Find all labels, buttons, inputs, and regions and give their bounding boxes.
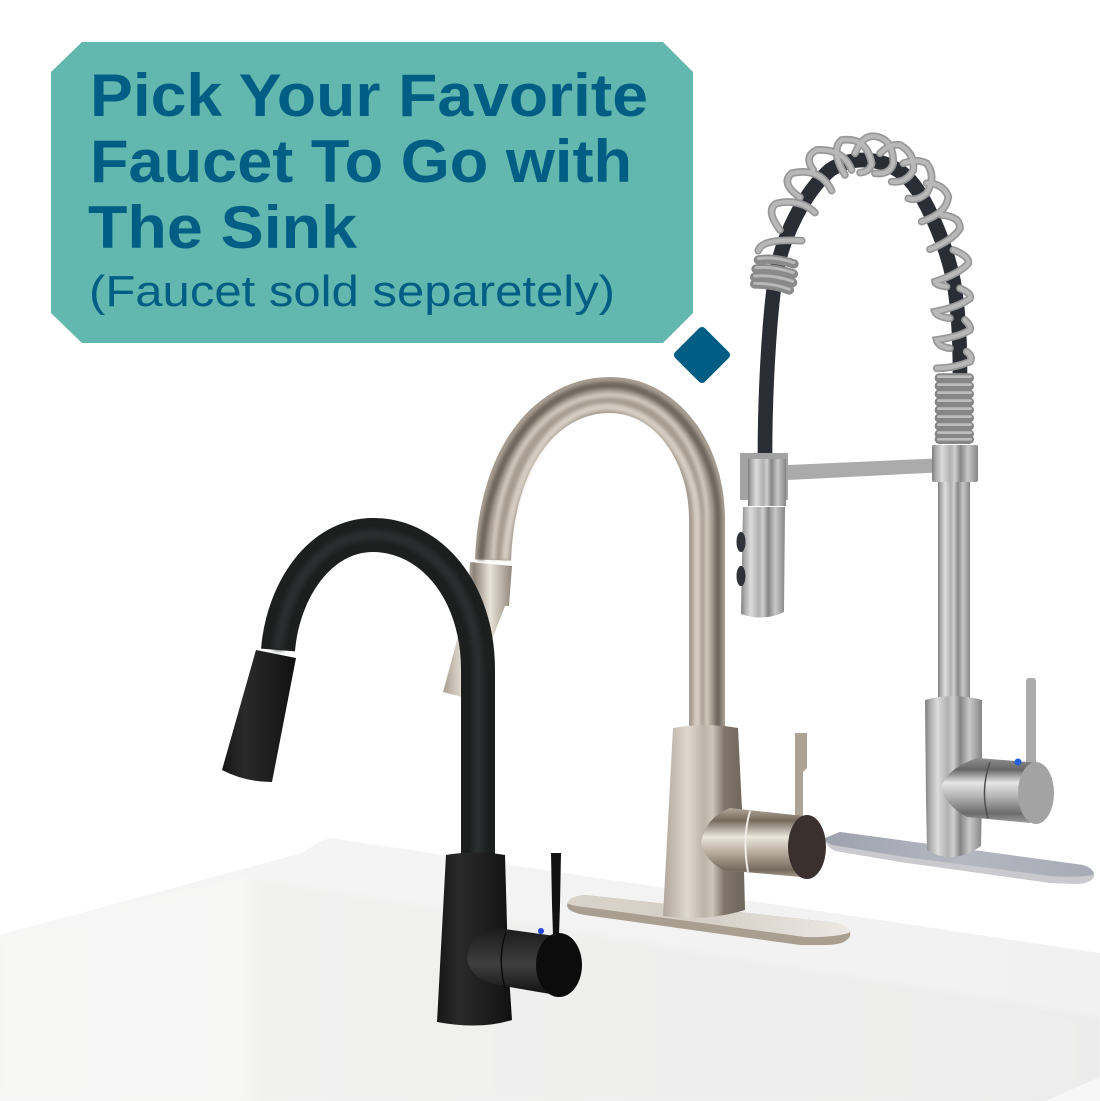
title [88, 62, 648, 261]
handle [467, 927, 582, 997]
deck plate: chrome [825, 832, 1094, 884]
base body [437, 852, 512, 1026]
title: Faucet To Go with [90, 128, 632, 195]
coil wire [758, 136, 971, 368]
icon: diamond [672, 325, 732, 385]
lever [551, 853, 561, 935]
handle [941, 758, 1054, 824]
subtitle: (Faucet sold separetely) [89, 267, 615, 316]
riser collar [932, 445, 978, 482]
base cylinder [925, 696, 982, 857]
black tube [278, 535, 478, 860]
panel: heading [51, 42, 693, 343]
faucet: matte black gooseneck [222, 535, 582, 1026]
wrapped coil at riser [939, 378, 969, 439]
sprayer clamp [740, 453, 788, 506]
gooseneck tube [481, 385, 718, 735]
spray head [222, 650, 296, 782]
faucet: chrome spring pull-down [736, 136, 1094, 884]
handle [701, 808, 826, 879]
faucet: brushed nickel gooseneck [443, 385, 850, 945]
sprayer head [736, 507, 785, 618]
base body [663, 725, 745, 918]
sink [0, 838, 1100, 1101]
spring and black hose [755, 136, 971, 453]
wrapped coil at hose end [755, 259, 794, 290]
crossbar arm [788, 458, 947, 480]
title: The Sink [88, 194, 358, 261]
black hose [765, 160, 960, 453]
riser pipe [938, 482, 970, 702]
deck plate: nickel [567, 895, 850, 945]
pull-down nozzle [443, 562, 512, 697]
lever [795, 733, 807, 817]
lever [1026, 678, 1036, 768]
title: Pick Your Favorite [90, 62, 648, 129]
